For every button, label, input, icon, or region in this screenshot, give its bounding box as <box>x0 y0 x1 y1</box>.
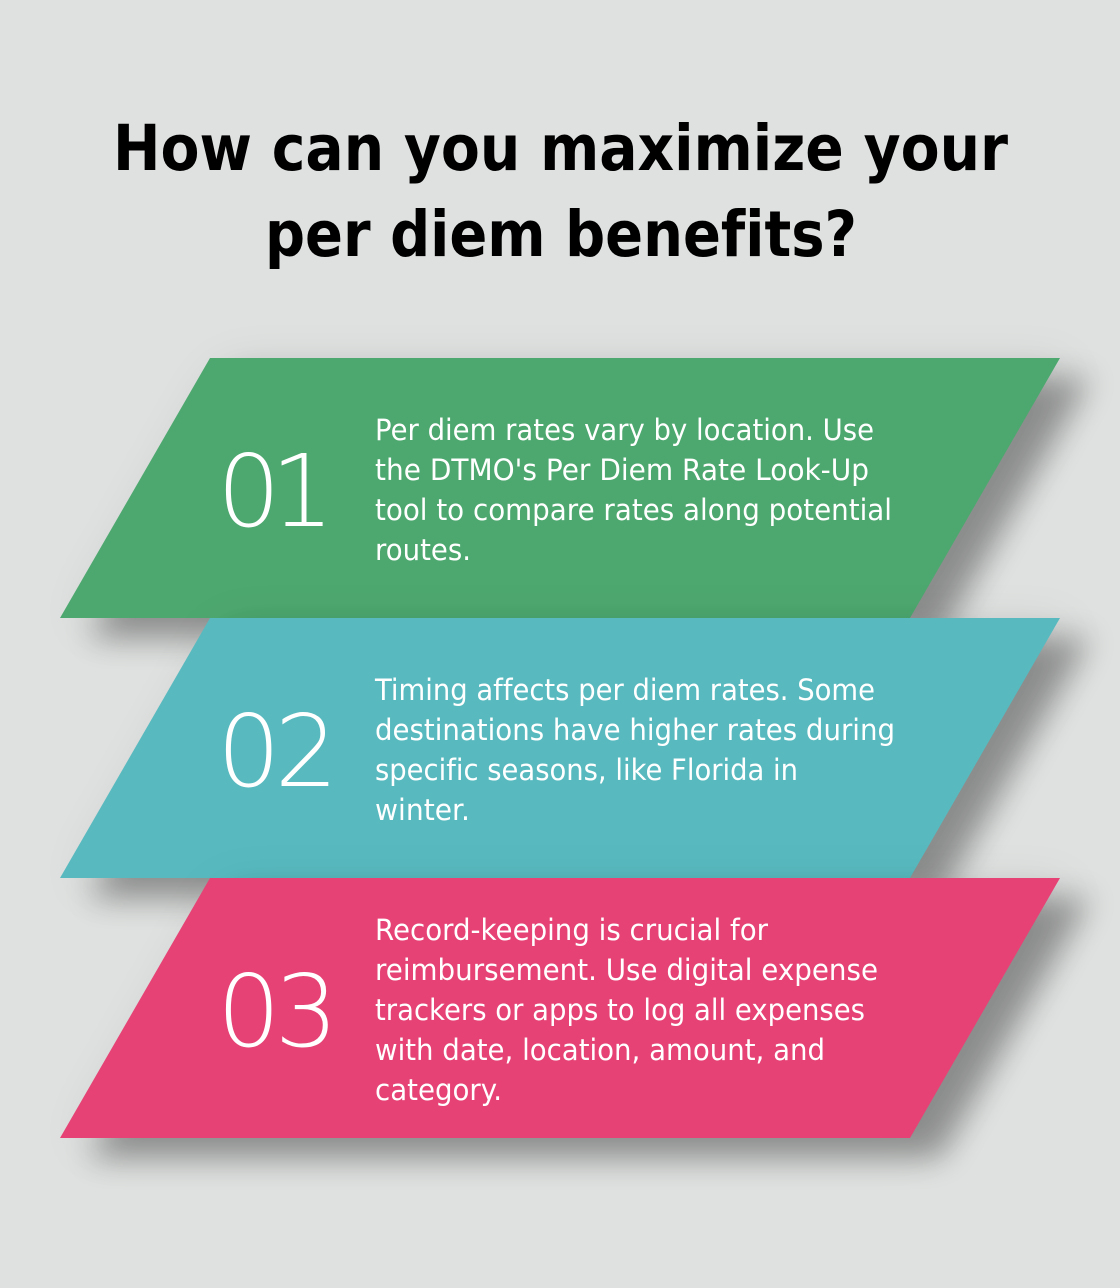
step 01 text: tool to compare rates along potential <box>375 493 892 527</box>
panel: step 03 <box>60 878 1090 1158</box>
step 03 text: trackers or apps to log all expenses <box>375 993 865 1027</box>
step 02 shape <box>60 618 1060 878</box>
step 03 number: 03 <box>217 953 332 1070</box>
step 02 text: Timing affects per diem rates. Some <box>374 673 875 707</box>
title: How can you maximize your <box>113 111 1009 185</box>
step 03 text: reimbursement. Use digital expense <box>375 953 878 987</box>
step 02 number: 02 <box>217 693 332 810</box>
step 03 text: with date, location, amount, and <box>375 1033 825 1067</box>
step 03 text <box>375 913 878 1107</box>
title: per diem benefits? <box>265 197 857 271</box>
step 01 shape <box>60 358 1060 618</box>
step 01 text: the DTMO's Per Diem Rate Look-Up <box>375 453 869 487</box>
step 02 text: winter. <box>375 793 470 827</box>
step 03 text: Record-keeping is crucial for <box>375 913 769 947</box>
step 02 text: destinations have higher rates during <box>375 713 895 747</box>
step 02 text <box>374 673 895 827</box>
title <box>113 111 1009 271</box>
step 03 text: category. <box>375 1073 502 1107</box>
step 02 text: specific seasons, like Florida in <box>375 753 798 787</box>
step 03 shape <box>60 878 1060 1138</box>
step 01 text: Per diem rates vary by location. Use <box>375 413 874 447</box>
step 01 text <box>375 413 892 567</box>
panel: step 01 <box>60 358 1090 638</box>
panel: step 02 <box>60 618 1090 898</box>
step 01 text: routes. <box>375 533 471 567</box>
step 01 number: 01 <box>217 433 324 550</box>
